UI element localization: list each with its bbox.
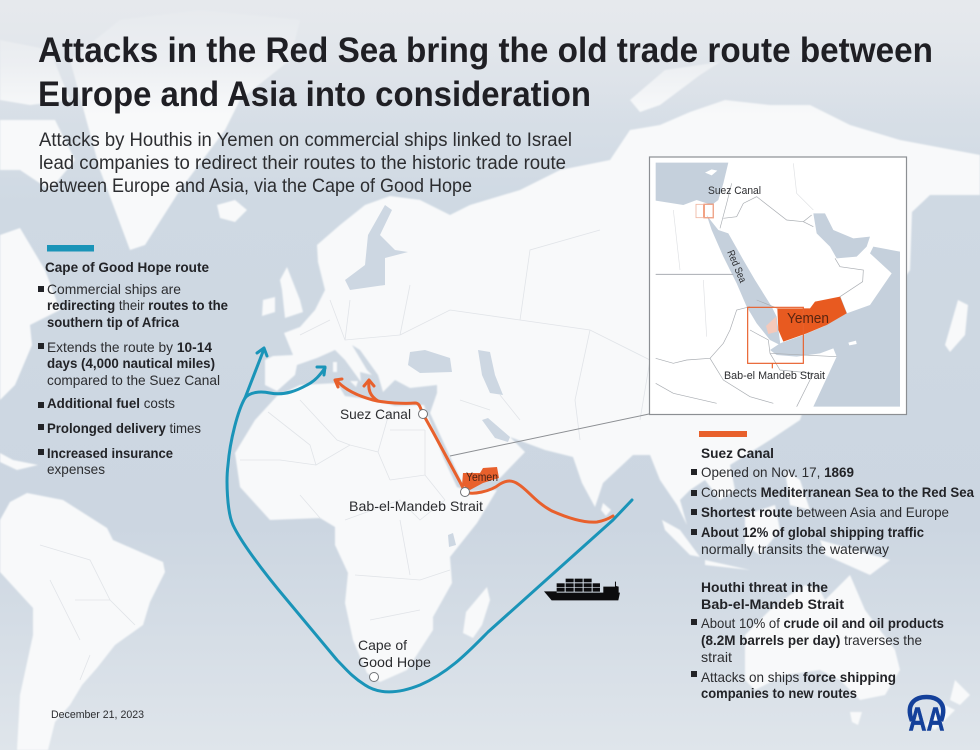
inset map: Red Sea [724, 248, 749, 285]
panel: Suez Canal: About 12% of global shipping traffic [701, 524, 924, 540]
title: Europe and Asia into consideration [38, 75, 591, 114]
panel: Cape of Good Hope route: days (4,000 nautical miles) [47, 355, 215, 371]
map points: Suez, Bab-el-Mandeb, Cape [370, 410, 470, 682]
map labels [340, 406, 498, 670]
panel: Houthi threat: Attacks on ships force shipping [701, 669, 896, 685]
map labels: Cape of [358, 637, 407, 653]
panel: Suez Canal [691, 431, 974, 557]
panel: Houthi threat: strait [701, 649, 732, 665]
panel: Houthi threat [691, 579, 944, 701]
panel: Suez Canal: Shortest route between Asia and Europe [701, 504, 949, 520]
Cape of Good Hope route (blue) [227, 348, 632, 692]
subtitle: between Europe and Asia, via the Cape of Good Hope [39, 176, 472, 197]
panel: Cape of Good Hope route: southern tip of Africa [47, 314, 179, 330]
inset map: Yemen [787, 310, 829, 327]
map labels: Bab-el-Mandeb Strait [349, 498, 483, 514]
subtitle: Attacks by Houthis in Yemen on commercial ships linked to Israel [39, 130, 572, 151]
panel: Houthi threat: Bab-el-Mandeb Strait [701, 596, 844, 612]
panel: Cape of Good Hope route: redirecting their routes to the [47, 297, 228, 313]
Suez Canal route (orange) [335, 379, 613, 522]
map labels: Suez Canal [340, 406, 411, 422]
panel: Cape of Good Hope route: Prolonged delivery times [47, 420, 201, 436]
panel: Cape of Good Hope route: Cape of Good Hope route [45, 259, 209, 275]
panel: Houthi threat: Houthi threat in the [701, 579, 828, 595]
inset map: Bab-el Mandeb Strait [724, 370, 825, 382]
panel: Suez Canal: Connects Mediterranean Sea to the Red Sea [701, 484, 974, 500]
inset map: Suez Canal [708, 185, 761, 197]
title [38, 31, 933, 114]
panel: Cape of Good Hope route: expenses [47, 461, 105, 477]
panel: Suez Canal: Suez Canal [701, 445, 774, 461]
icon: AA logo: AA [908, 700, 944, 738]
panel: Houthi threat: companies to new routes [701, 685, 857, 701]
inset map [650, 157, 906, 414]
panel: Cape of Good Hope route: compared to the Suez Canal [47, 372, 220, 388]
connector line from map to inset [450, 414, 649, 456]
panel: Houthi threat: (8.2M barrels per day) traverses the [701, 632, 922, 648]
Yemen on main map [462, 467, 499, 490]
panel: Suez Canal: Opened on Nov. 17, 1869 [701, 464, 854, 480]
panel: Cape of Good Hope route: Extends the route by 10-14 [47, 339, 212, 355]
panel: Suez Canal: normally transits the waterway [701, 541, 889, 557]
title: Attacks in the Red Sea bring the old trade route between [38, 31, 933, 70]
map labels: Yemen [466, 472, 498, 484]
map labels: Good Hope [358, 654, 431, 670]
panel: Cape of Good Hope route [38, 245, 228, 477]
panel: Houthi threat: About 10% of crude oil and oil products [701, 615, 944, 631]
subtitle: lead companies to redirect their routes to the historic trade route [39, 153, 566, 174]
panel: Cape of Good Hope route: Additional fuel costs [47, 395, 175, 411]
panel: Cape of Good Hope route: Commercial ships are [47, 281, 181, 297]
subtitle [39, 130, 572, 197]
date: December 21, 2023 [51, 709, 144, 721]
panel: Cape of Good Hope route: Increased insurance [47, 445, 173, 461]
icon: container ship [544, 579, 620, 600]
